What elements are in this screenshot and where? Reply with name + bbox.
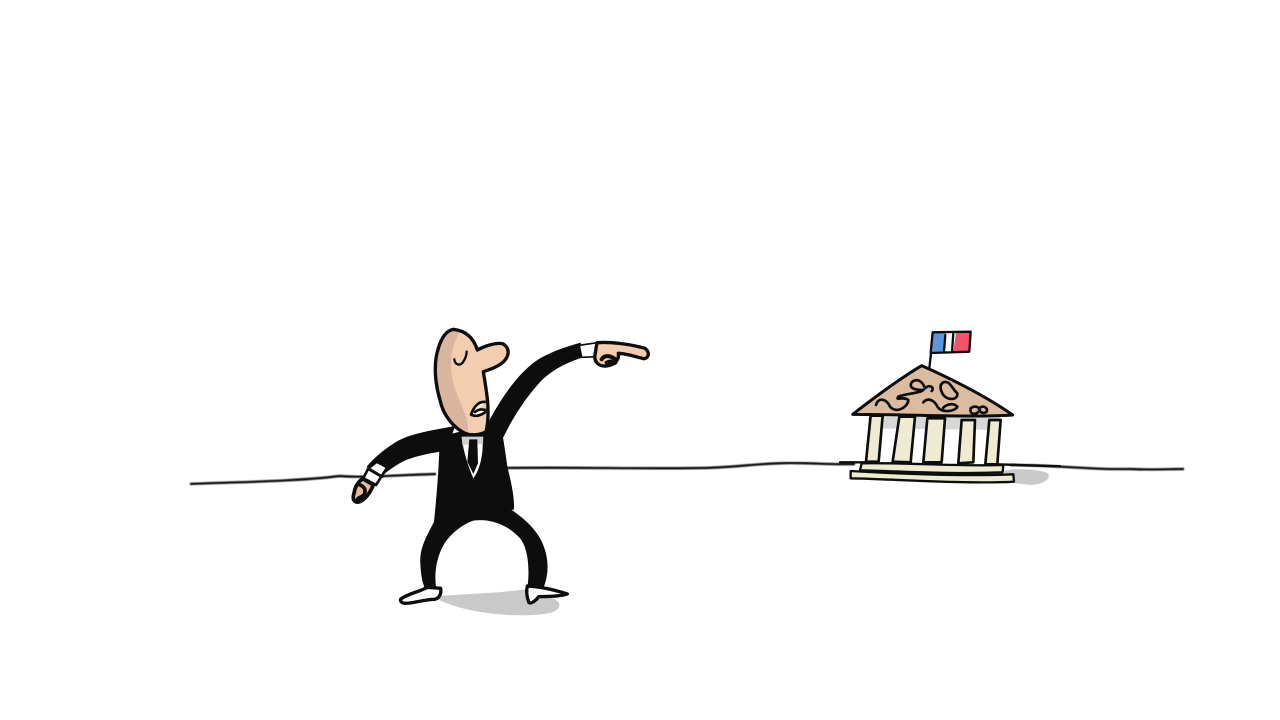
left shoe	[400, 587, 441, 603]
upper step	[860, 463, 1003, 473]
building: parliament with flag	[840, 332, 1060, 485]
head	[435, 329, 508, 435]
flag	[931, 332, 971, 353]
lowered arm sleeve	[367, 426, 455, 478]
pointing hand	[595, 342, 648, 366]
flag red	[953, 332, 971, 352]
lowered hand fingers	[357, 485, 365, 500]
shirt collar	[462, 437, 483, 478]
floor shadow	[433, 589, 559, 615]
lower step	[851, 471, 1014, 482]
legs	[420, 510, 548, 589]
face outline	[435, 329, 508, 435]
face	[435, 329, 508, 435]
building interior shade	[868, 417, 1000, 430]
flag blue	[931, 332, 946, 353]
raised arm cuff	[579, 343, 597, 357]
right shoe	[527, 586, 567, 603]
tie	[467, 439, 478, 474]
lowered arm cuff	[363, 462, 387, 485]
raised arm sleeve	[485, 343, 583, 437]
building shadow	[1003, 469, 1049, 485]
flag pole	[929, 338, 933, 368]
collar shade	[462, 437, 483, 445]
cuff band	[369, 469, 382, 477]
roof squiggles	[876, 380, 987, 414]
face shading	[436, 329, 468, 433]
columns	[866, 416, 1001, 464]
character: man pointing	[353, 329, 648, 615]
mouth	[471, 402, 487, 416]
ground line behind columns	[840, 462, 1060, 466]
jacket	[434, 425, 514, 523]
roof pediment	[853, 366, 1013, 416]
lowered hand	[353, 479, 373, 502]
flag white	[931, 332, 971, 353]
ground line	[190, 463, 1184, 484]
flag outline	[931, 332, 971, 353]
pointing hand fingers	[602, 356, 616, 363]
closed eye	[454, 352, 467, 365]
